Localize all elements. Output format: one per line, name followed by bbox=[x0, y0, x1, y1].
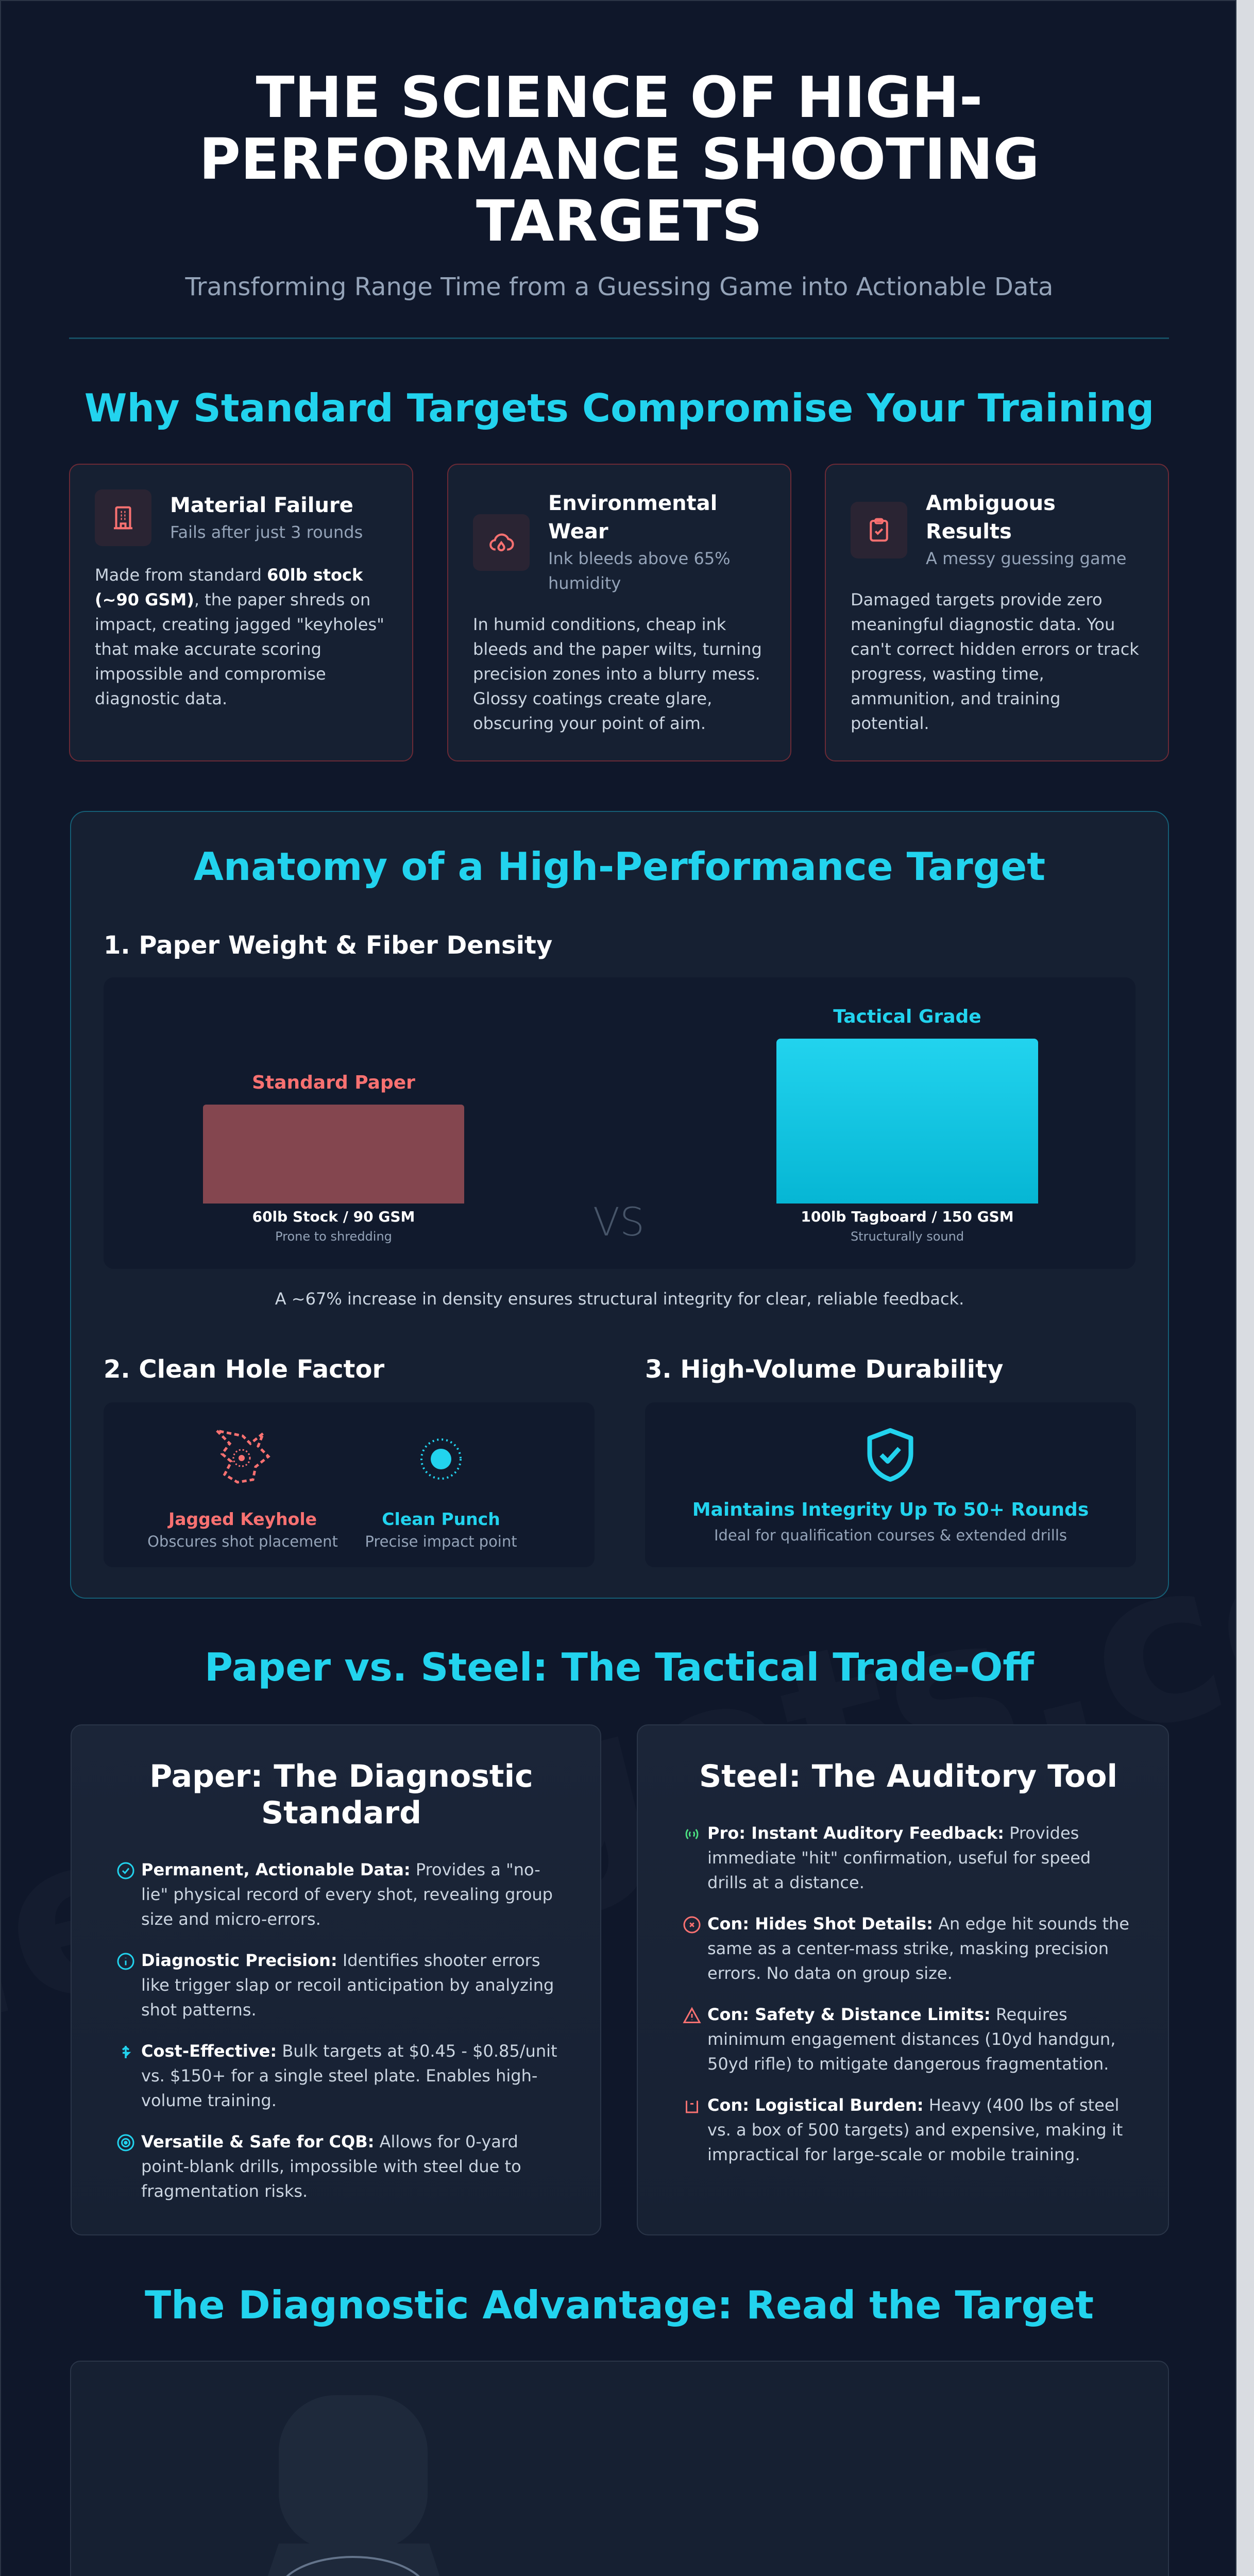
caption: A ~67% increase in density ensures structural integrity for clear, reliable feedback. bbox=[275, 1289, 964, 1309]
label: tactical: Tactical Grade bbox=[833, 1006, 981, 1027]
bar: standard bbox=[203, 1105, 464, 1204]
chart: paper weight bbox=[104, 977, 1136, 1269]
card: environmental wear bbox=[447, 464, 791, 761]
card: ambiguous results: Damaged targets provide zero meaningful diagnostic data. You can't correct hidden errors or track progress, wasting time, ammunition, and training potential. bbox=[851, 590, 1139, 733]
panel: steel: Steel: The Auditory Tool bbox=[699, 1758, 1117, 1794]
box: clean hole: Clean Punch bbox=[382, 1509, 500, 1529]
icon: clean punch bbox=[420, 1438, 462, 1480]
card: environmental wear: humidity bbox=[548, 573, 621, 593]
subtitle: Transforming Range Time from a Guessing Game into Actionable Data bbox=[185, 273, 1053, 301]
chart: paper weight: 60lb Stock / 90 GSM bbox=[252, 1208, 415, 1225]
item: permanent data: Permanent, Actionable Data: Provides a "no-lie" physical record of every shot, revealing group size and micro-errors. bbox=[141, 1860, 553, 1929]
item: pro feedback: Pro: Instant Auditory Feedback: Provides immediate "hit" confirmation, useful for speed drills at a distance. bbox=[707, 1823, 1091, 1892]
item: versatile: Versatile & Safe for CQB: Allows for 0-yard point-blank drills, impossible with steel due to fragmentation risks. bbox=[141, 2132, 521, 2201]
card: ambiguous results: Ambiguous bbox=[926, 492, 1056, 515]
icon: building bbox=[95, 489, 151, 546]
item: hides details: Con: Hides Shot Details: An edge hit sounds the same as a center-mass strike, masking precision errors. No data on group size. bbox=[707, 1914, 1129, 1983]
chart: paper weight: Structurally sound bbox=[851, 1229, 964, 1244]
item: logistics: Con: Logistical Burden: Heavy (400 lbs of steel vs. a box of 500 targets) and expensive, making it impractical for large-scale or mobile training. bbox=[707, 2095, 1123, 2164]
card: environmental wear: In humid conditions, cheap ink bleeds and the paper wilts, turning precision zones into a blurry mess. Glossy coatings create glare, obscuring your point of aim. bbox=[473, 615, 762, 733]
card: environmental wear: Ink bleeds above 65% bbox=[548, 549, 731, 568]
panel: paper: Paper: The Diagnostic bbox=[149, 1758, 533, 1794]
card: environmental wear: Wear bbox=[548, 520, 608, 544]
panel: steel bbox=[637, 1724, 1169, 2235]
icon: clipboard bbox=[851, 502, 907, 558]
card: material failure: Made from standard 60lb stock (~90 GSM), the paper shreds on impact, creating jagged "keyholes" that make accurate scoring impossible and compromise diagnostic data. bbox=[95, 565, 384, 708]
title bbox=[199, 64, 1040, 254]
panel: paper bbox=[71, 1724, 601, 2235]
icon: shield bbox=[868, 1428, 913, 1482]
card: material failure: Material Failure bbox=[170, 494, 353, 517]
icon: cloud drop bbox=[473, 514, 530, 571]
bar: tactical bbox=[776, 1039, 1038, 1204]
panel: anatomy bbox=[70, 811, 1169, 1599]
item: safety: Con: Safety & Distance Limits: Requires minimum engagement distances (10yd handgun, 50yd rifle) to mitigate dangerous fragmentation. bbox=[707, 2005, 1115, 2074]
card: ambiguous results: Results bbox=[926, 520, 1012, 544]
card: environmental wear: Environmental bbox=[548, 492, 717, 515]
box: clean hole bbox=[104, 1402, 595, 1567]
subheading 3: 3. High-Volume Durability bbox=[645, 1355, 1003, 1384]
box: durability: Maintains Integrity Up To 50+ Rounds bbox=[692, 1499, 1089, 1520]
vs: VS bbox=[593, 1199, 645, 1245]
diagram: silhouette target bbox=[268, 2395, 439, 2576]
chart: paper weight: 100lb Tagboard / 150 GSM bbox=[801, 1208, 1014, 1225]
card: material failure bbox=[69, 464, 413, 761]
box: clean hole: Obscures shot placement bbox=[147, 1533, 338, 1550]
heading: anatomy: Anatomy of a High-Performance Target bbox=[194, 844, 1045, 889]
title: THE SCIENCE OF HIGH- bbox=[256, 64, 982, 130]
item: diagnostic precision: Diagnostic Precision: Identifies shooter errors like trigger slap or recoil anticipation by analyzing shot patterns. bbox=[141, 1951, 554, 2020]
heading: why standard targets: Why Standard Targets Compromise Your Training bbox=[84, 385, 1154, 431]
box: durability bbox=[645, 1402, 1136, 1567]
panel: read the target bbox=[70, 2361, 1169, 2576]
panel: paper: Standard bbox=[261, 1795, 421, 1831]
box: clean hole: Jagged Keyhole bbox=[168, 1509, 317, 1529]
title: TARGETS bbox=[476, 188, 762, 254]
subheading 2: 2. Clean Hole Factor bbox=[104, 1355, 384, 1384]
card: ambiguous results bbox=[825, 464, 1169, 761]
card: ambiguous results: A messy guessing game bbox=[926, 549, 1126, 568]
subheading 1: 1. Paper Weight & Fiber Density bbox=[104, 931, 552, 960]
heading: paper vs steel: Paper vs. Steel: The Tactical Trade-Off bbox=[205, 1645, 1034, 1690]
heading: diagnostic advantage: The Diagnostic Advantage: Read the Target bbox=[145, 2282, 1094, 2328]
title: PERFORMANCE SHOOTING bbox=[199, 126, 1040, 192]
box: durability: Ideal for qualification courses & extended drills bbox=[714, 1527, 1067, 1544]
label: standard: Standard Paper bbox=[252, 1072, 415, 1093]
box: clean hole: Precise impact point bbox=[365, 1533, 517, 1550]
chart: paper weight: Prone to shredding bbox=[275, 1229, 392, 1244]
icon: jagged keyhole bbox=[216, 1430, 270, 1484]
card: material failure: Fails after just 3 rounds bbox=[170, 522, 363, 542]
item: cost-effective: Cost-Effective: Bulk targets at $0.45 - $0.85/unit vs. $150+ for a single steel plate. Enables high-volume training. bbox=[141, 2041, 557, 2110]
